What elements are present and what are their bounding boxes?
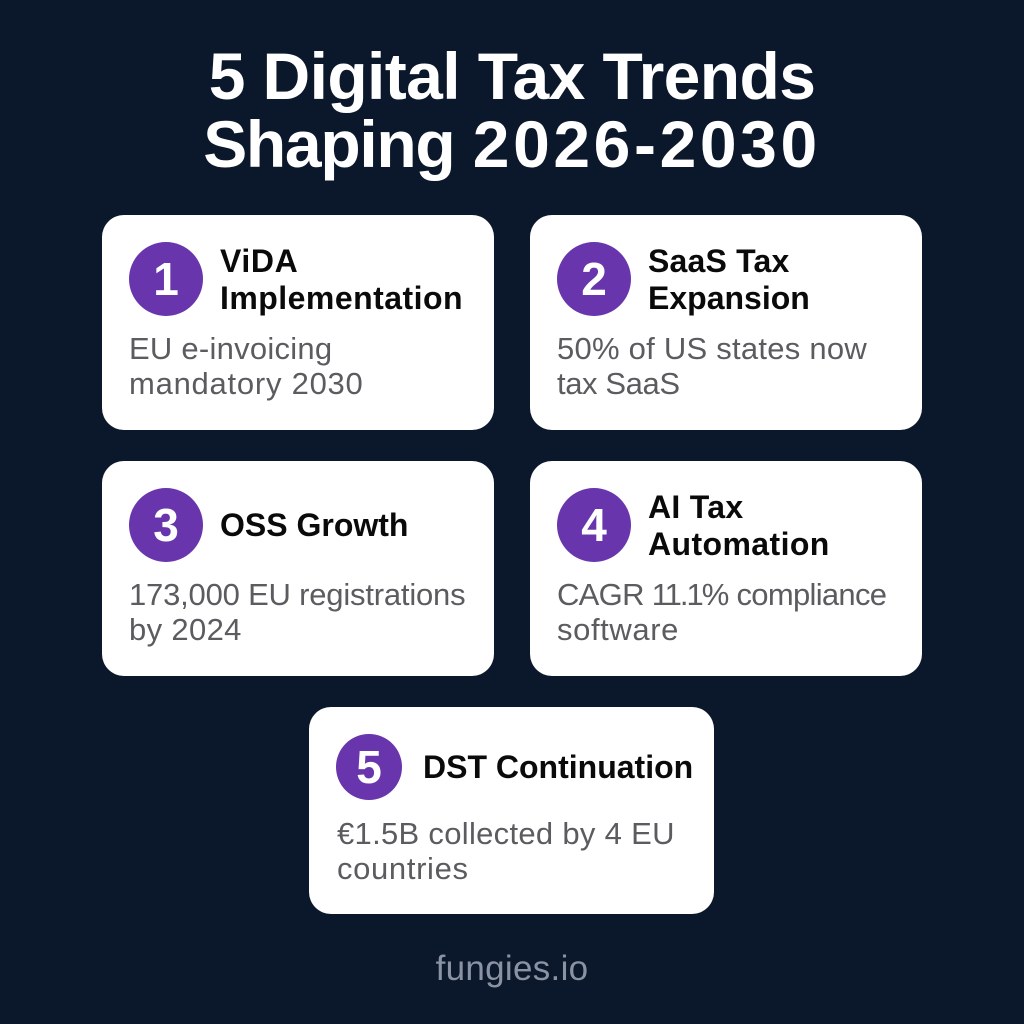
heading: SaaS Tax Expansion: Expansion [648, 280, 810, 316]
text: EU registrations: by 2024 [129, 612, 242, 647]
heading: ViDA Implementation: Implementation [220, 280, 463, 316]
text: EU registrations [129, 577, 465, 647]
icon: number 1: 1 [153, 253, 179, 305]
icon: number 1 [129, 242, 203, 316]
icon: number 2 [557, 242, 631, 316]
heading: AI Tax Automation: AI Tax [648, 489, 743, 525]
icon: number 2: 2 [581, 253, 607, 305]
heading: DST Continuation: DST Continuation [423, 749, 693, 785]
text: collected: €1.5B collected by 4 EU [337, 816, 675, 851]
icon: number 4 [557, 488, 631, 562]
footer: brand: fungies.io [436, 949, 588, 988]
text: EU e-invoicing: EU e-invoicing [129, 331, 332, 366]
text: CAGR [557, 577, 886, 647]
text: US states: 50% of US states now [557, 331, 867, 366]
text: EU e-invoicing: mandatory 2030 [129, 366, 364, 401]
icon: number 5 [336, 734, 402, 800]
text: US states: tax SaaS [557, 366, 680, 401]
heading: ViDA Implementation [220, 243, 463, 316]
panel: trend 4 AI Tax Automation [530, 461, 922, 676]
panel: trend 2 SaaS Tax Expansion [530, 215, 922, 430]
panel: trend 3 OSS Growth [102, 461, 494, 676]
text: EU registrations: 173,000 EU registrations [129, 577, 465, 612]
panel: trend 5 DST Continuation [309, 707, 714, 914]
icon: number 4: 4 [581, 499, 607, 551]
icon: number 3 [129, 488, 203, 562]
title: 5 Digital Tax Trends [209, 39, 815, 113]
text: collected: countries [337, 851, 469, 886]
icon: number 5: 5 [356, 741, 382, 793]
text: collected [337, 816, 675, 886]
heading: AI Tax Automation: Automation [648, 526, 830, 562]
heading: SaaS Tax Expansion [648, 243, 810, 316]
heading: ViDA Implementation: ViDA [220, 243, 298, 279]
text: EU e-invoicing [129, 331, 364, 401]
heading: AI Tax Automation [648, 489, 830, 562]
heading: SaaS Tax Expansion: SaaS Tax [648, 243, 790, 279]
icon: number 3: 3 [153, 499, 179, 551]
text: CAGR: CAGR 11.1% compliance [557, 577, 886, 612]
title [203, 39, 821, 181]
text: US states [557, 331, 867, 401]
heading: OSS Growth: OSS Growth [220, 507, 408, 543]
panel: trend 1 ViDA Implementation [102, 215, 494, 430]
title: Shaping 2026-2030 [203, 107, 821, 181]
text: CAGR: software [557, 612, 679, 647]
